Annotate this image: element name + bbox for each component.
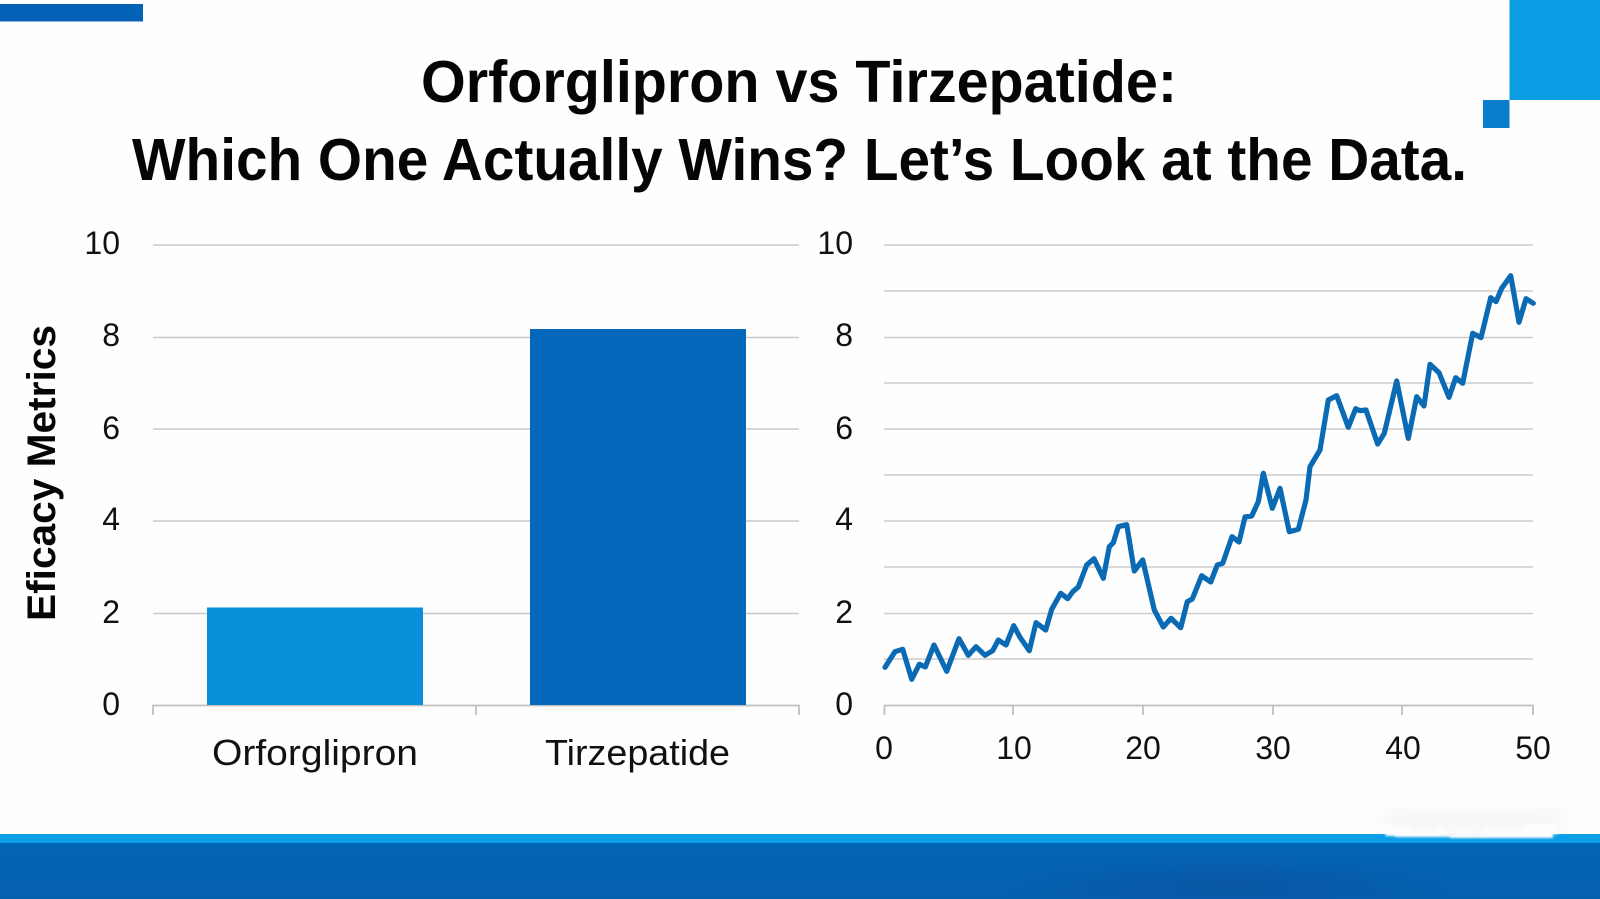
title: Which One Actually Wins? Let’s Look at the Data.	[132, 127, 1467, 193]
line chart y-axis labels: 2	[835, 594, 853, 630]
decorative bar: top left	[0, 4, 143, 22]
line chart gridlines	[884, 245, 1533, 715]
line chart x-axis labels: 10	[996, 730, 1032, 766]
bar chart category labels: Tirzepatide	[545, 732, 730, 773]
bar chart y-axis labels: 0	[102, 686, 120, 722]
line chart x-axis labels: 0	[875, 730, 893, 766]
data line	[885, 276, 1533, 679]
line chart x-axis labels	[875, 730, 1551, 766]
bar chart category labels: Orforglipron	[212, 732, 418, 773]
bar: Tirzepatide	[530, 329, 746, 705]
bar chart: efficacy by drug	[84, 225, 799, 773]
bar chart y-axis labels: 10	[84, 225, 120, 261]
line chart y-axis labels: 10	[817, 225, 853, 261]
line chart x-axis labels: 20	[1125, 730, 1161, 766]
bar chart y-axis labels: 8	[102, 317, 120, 353]
line chart: trend over time	[817, 225, 1551, 766]
bar chart y-axis labels: 4	[102, 501, 120, 537]
bar chart category labels	[212, 732, 730, 773]
line chart x-axis labels: 30	[1255, 730, 1291, 766]
line chart y-axis labels	[817, 225, 853, 722]
bar chart y-axis labels	[84, 225, 120, 722]
title	[132, 49, 1467, 193]
bar: Orforglipron	[207, 608, 423, 705]
line chart y-axis labels: 6	[835, 410, 853, 446]
line chart y-axis labels: 4	[835, 501, 853, 537]
line chart y-axis labels: 0	[835, 686, 853, 722]
bar chart y-axis labels: 2	[102, 594, 120, 630]
line chart x-axis labels: 50	[1515, 730, 1551, 766]
y-axis title: efficacy metrics: Eficacy Metrics	[20, 325, 64, 621]
decorative squares: top right	[1483, 0, 1600, 128]
footer band	[0, 810, 1600, 899]
bar chart y-axis labels: 6	[102, 410, 120, 446]
line chart x-axis labels: 40	[1385, 730, 1421, 766]
line chart y-axis labels: 8	[835, 317, 853, 353]
bar chart gridlines	[153, 245, 799, 715]
title: Orforglipron vs Tirzepatide:	[421, 49, 1177, 115]
